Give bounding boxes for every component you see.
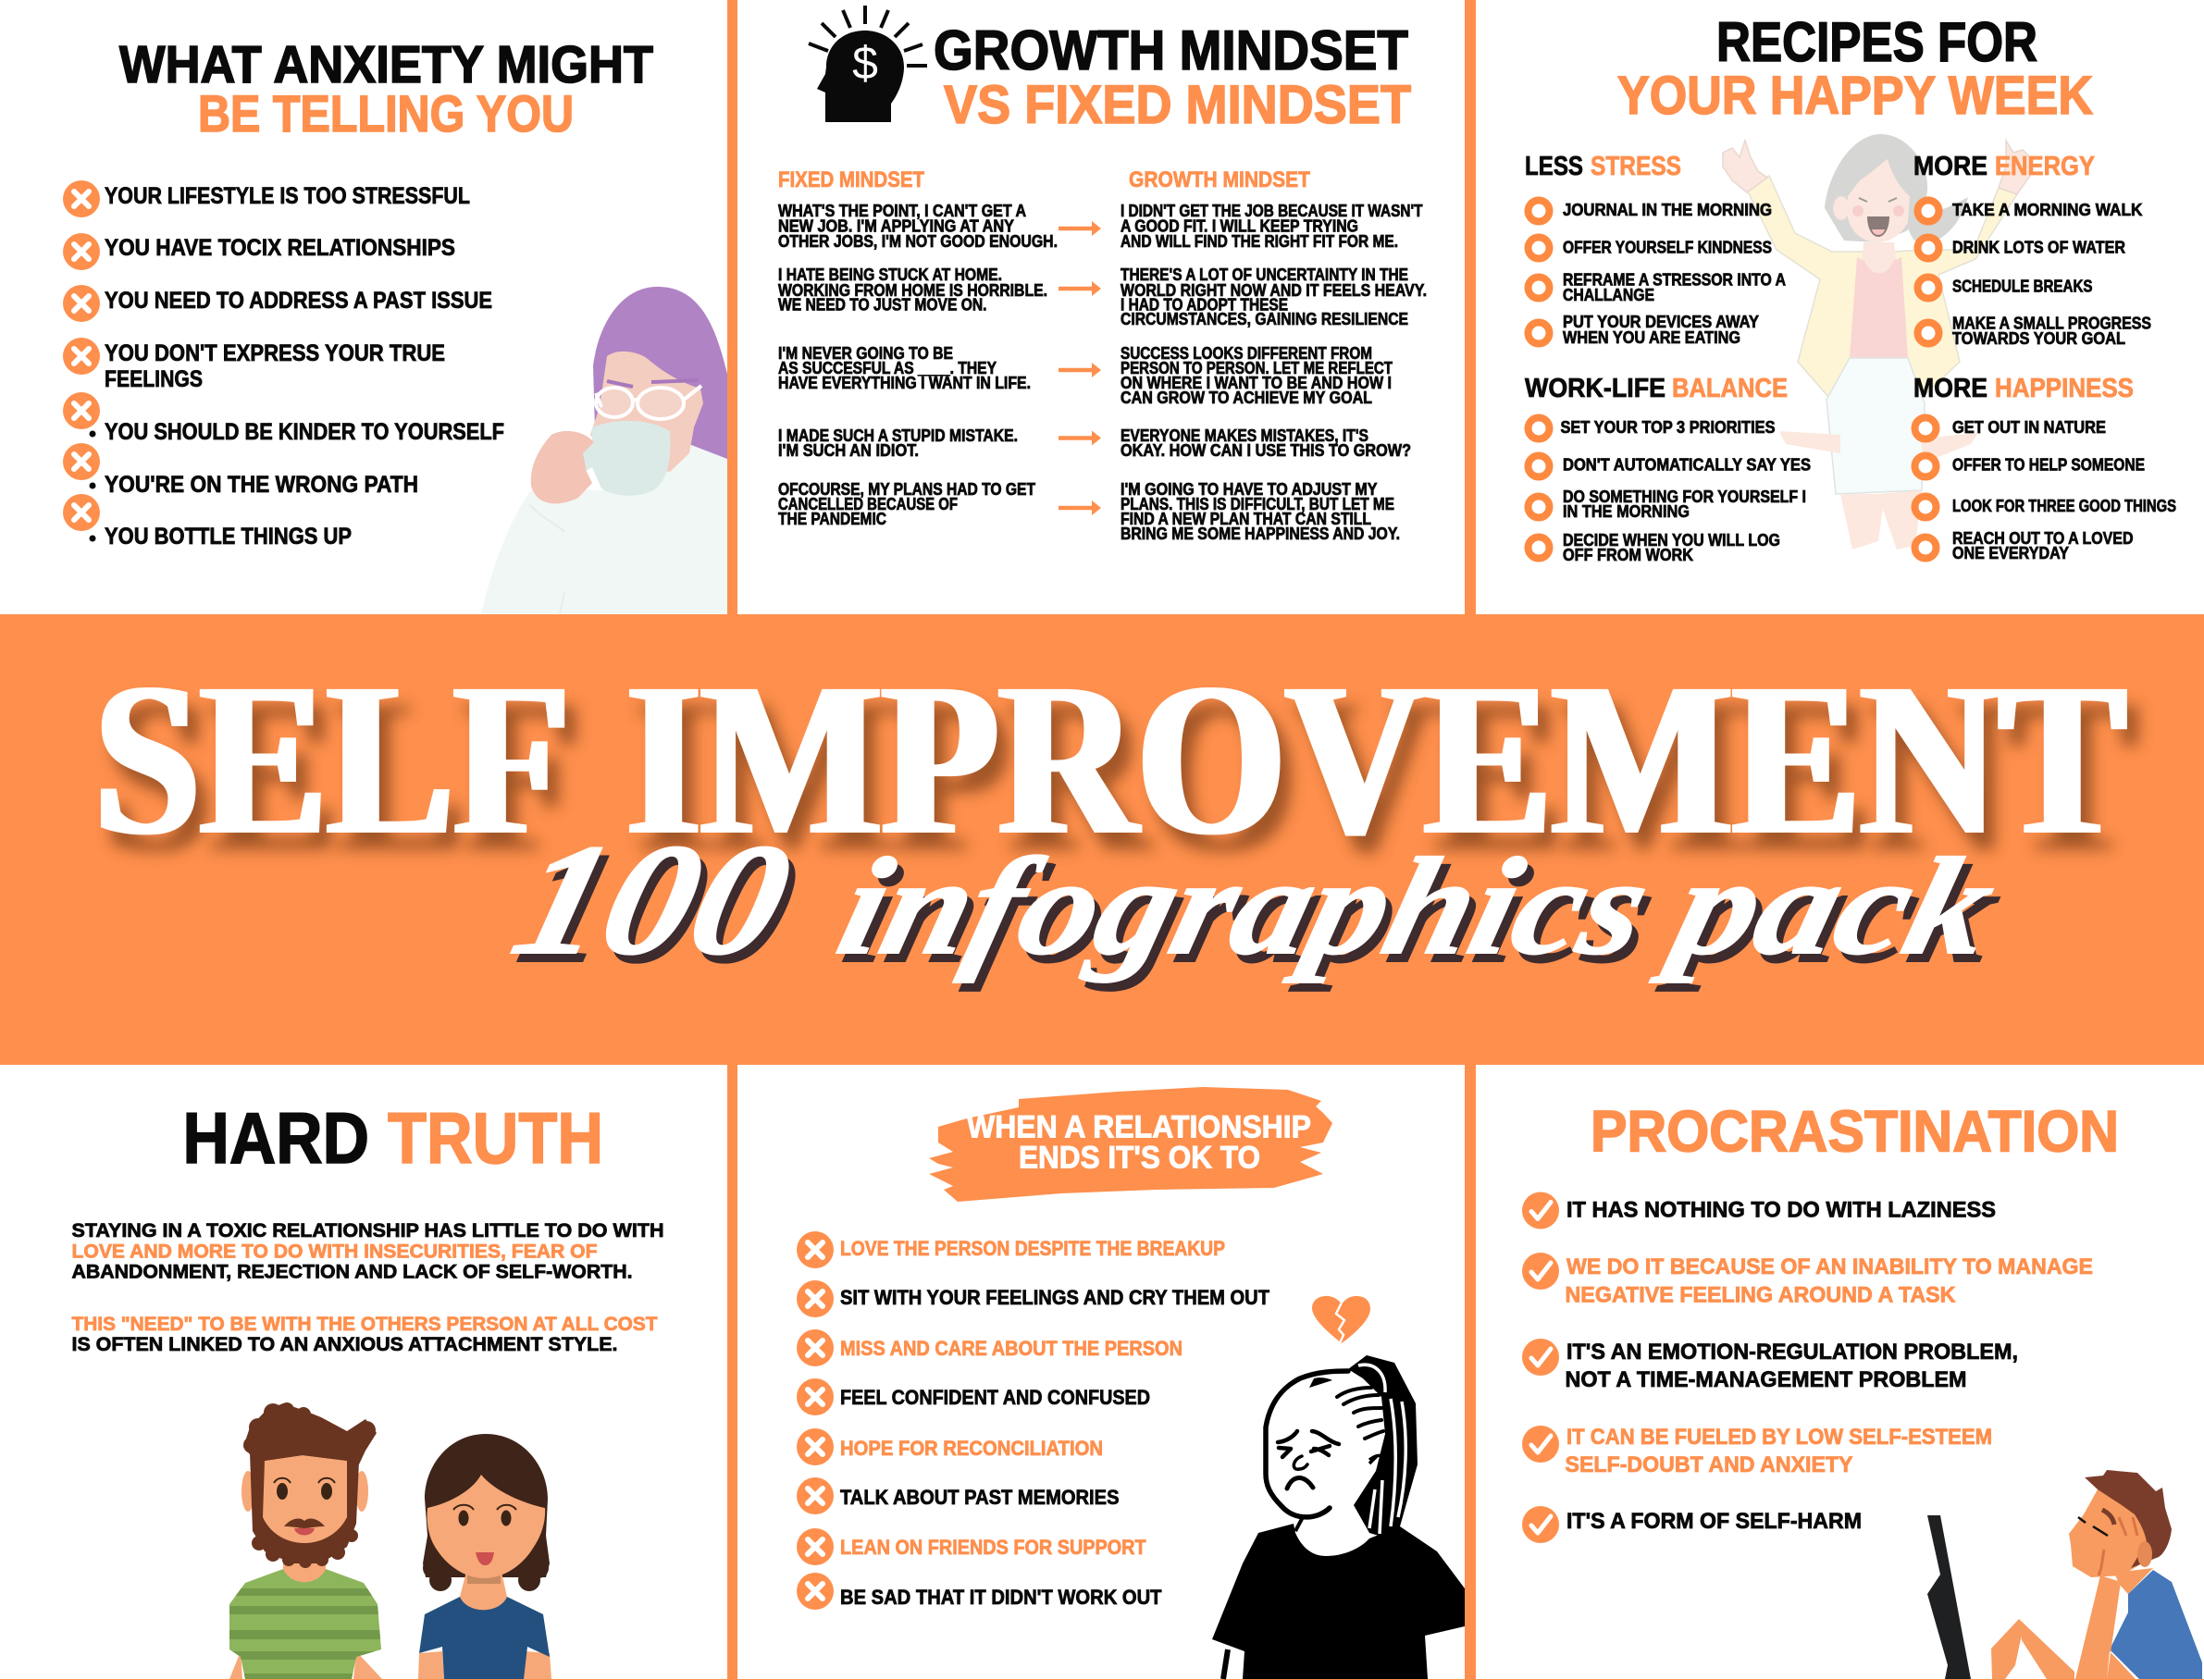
row 3: success: CAN GROW TO ACHIEVE MY GOAL bbox=[1121, 389, 1372, 407]
list item: laziness bbox=[1522, 1192, 1996, 1229]
text block: toxic relationship: STAYING IN A TOXIC RELATIONSHIP HAS LITTLE TO DO WITH bbox=[72, 1219, 664, 1241]
row 2: home: CIRCUMSTANCES, GAINING RESILIENCE bbox=[1121, 310, 1408, 328]
list: more happiness: OFFER TO HELP SOMEONE bbox=[1952, 455, 2145, 474]
heading: recipes for your happy week: YOUR HAPPY WEEK bbox=[1617, 66, 2093, 126]
row 1: job: AND WILL FIND THE RIGHT FIT FOR ME. bbox=[1121, 232, 1398, 251]
heading: recipes for your happy week: RECIPES FOR bbox=[1716, 11, 2037, 73]
list item: be sad: BE SAD THAT IT DIDN'T WORK OUT bbox=[840, 1586, 1162, 1609]
text block: anxious attachment bbox=[72, 1313, 657, 1355]
row 5: plans: FIND A NEW PLAN THAT CAN STILL bbox=[1121, 510, 1371, 528]
panel: when a relationship ends bbox=[797, 1087, 1465, 1679]
panel: hard truth bbox=[72, 1097, 664, 1680]
subtitle: 100 infographics pack bbox=[499, 810, 2015, 995]
heading: hard truth: HARD bbox=[183, 1097, 369, 1179]
list: work-life balance: DECIDE WHEN YOU WILL LOG bbox=[1563, 530, 1780, 550]
list item: sit with feelings: SIT WITH YOUR FEELINGS AND CRY THEM OUT bbox=[840, 1286, 1269, 1309]
list: more energy: DRINK LOTS OF WATER bbox=[1952, 237, 2125, 257]
list: more energy: TOWARDS YOUR GOAL bbox=[1952, 328, 2125, 348]
column heading: growth mindset: GROWTH MINDSET bbox=[1129, 167, 1310, 192]
subheading: less stress: LESS bbox=[1525, 152, 1583, 181]
list item: low self-esteem bbox=[1522, 1425, 1992, 1477]
heading: what anxiety might be telling you bbox=[119, 35, 653, 142]
list item: true feelings: YOU DON'T EXPRESS YOUR TRUE bbox=[105, 340, 445, 366]
list: more happiness bbox=[1915, 417, 2176, 562]
list: more happiness: GET OUT IN NATURE bbox=[1952, 417, 2106, 437]
subtitle: 100 infographics pack: infographics bbox=[825, 829, 1664, 982]
banner: self improvement title bbox=[0, 614, 2204, 1065]
subtitle: 100 infographics pack: pack bbox=[1655, 837, 2015, 991]
row 1: job: WHAT'S THE POINT, I CAN'T GET A bbox=[778, 202, 1026, 220]
heading: what anxiety might be telling you: WHAT ANXIETY MIGHT bbox=[119, 35, 653, 94]
text block: anxious attachment: IS OFTEN LINKED TO AN ANXIOUS ATTACHMENT STYLE. bbox=[72, 1333, 618, 1355]
row 1: job: NEW JOB. I'M APPLYING AT ANY bbox=[778, 216, 1014, 235]
row 5: plans: THE PANDEMIC bbox=[778, 510, 886, 528]
text block: toxic relationship: LOVE AND MORE TO DO WITH INSECURITIES, FEAR OF bbox=[72, 1240, 598, 1262]
title: self improvement: SELF bbox=[94, 638, 570, 881]
heading: brush stroke banner bbox=[929, 1087, 1332, 1202]
list: work-life balance: OFF FROM WORK bbox=[1563, 545, 1694, 564]
text block: anxious attachment: THIS "NEED" TO BE WITH THE OTHERS PERSON AT ALL COST bbox=[72, 1313, 657, 1335]
row 1: job: I DIDN'T GET THE JOB BECAUSE IT WASN'T bbox=[1121, 202, 1423, 220]
row 1: job: OTHER JOBS, I'M NOT GOOD ENOUGH. bbox=[778, 232, 1058, 251]
row 2: home: I HATE BEING STUCK AT HOME. bbox=[778, 266, 1002, 284]
row 3: success: HAVE EVERYTHING I WANT IN LIFE. bbox=[778, 374, 1031, 392]
text block: toxic relationship bbox=[72, 1219, 664, 1282]
subheading: work-life balance bbox=[1525, 374, 1788, 403]
subheading: more happiness: MORE bbox=[1913, 374, 1987, 403]
row 3: success bbox=[778, 344, 1393, 407]
illustration: computer monitor bbox=[1927, 1515, 1971, 1679]
list item: lean on friends bbox=[797, 1528, 1146, 1565]
list item: sit with feelings bbox=[797, 1280, 1269, 1317]
list: less stress bbox=[1529, 200, 1786, 347]
list: less stress: OFFER YOURSELF KINDNESS bbox=[1563, 237, 1772, 257]
row 5: plans bbox=[778, 480, 1400, 543]
heading: what anxiety might be telling you: BE TELLING YOU bbox=[198, 84, 574, 142]
illustration: woman drinking from a mug bbox=[481, 287, 727, 614]
list item: kinder bbox=[63, 392, 504, 445]
row 2: home: I HAD TO ADOPT THESE bbox=[1121, 296, 1288, 315]
row 3: success: I'M NEVER GOING TO BE bbox=[778, 344, 953, 363]
list item: lean on friends: LEAN ON FRIENDS FOR SUPPORT bbox=[840, 1536, 1146, 1559]
list item: true feelings: FEELINGS bbox=[105, 366, 203, 392]
subheading: less stress bbox=[1525, 152, 1681, 181]
subtitle: 100 infographics pack: infographics bbox=[832, 837, 1670, 991]
icon: head with dollar sign and rays: $ bbox=[852, 37, 878, 89]
list item: bottle things up bbox=[63, 494, 352, 550]
list: more happiness: ONE EVERYDAY bbox=[1952, 543, 2070, 562]
list item: past memories: TALK ABOUT PAST MEMORIES bbox=[840, 1486, 1120, 1509]
row 4: mistakes: I MADE SUCH A STUPID MISTAKE. bbox=[778, 426, 1018, 445]
row 4: mistakes: EVERYONE MAKES MISTAKES, IT'S bbox=[1121, 426, 1368, 445]
row 5: plans: OFCOURSE, MY PLANS HAD TO GET bbox=[778, 480, 1035, 499]
list: less stress: REFRAME A STRESSOR INTO A bbox=[1563, 270, 1786, 289]
subheading: more energy: ENERGY bbox=[1995, 152, 2095, 181]
heading: growth mindset vs fixed mindset: GROWTH MINDSET bbox=[934, 19, 1408, 81]
list item: confident and confused: FEEL CONFIDENT AND CONFUSED bbox=[840, 1386, 1150, 1409]
subheading: work-life balance: BALANCE bbox=[1672, 374, 1788, 403]
list item: past issue bbox=[63, 285, 492, 322]
heading: hard truth bbox=[183, 1097, 603, 1179]
list item: confident and confused bbox=[797, 1378, 1150, 1415]
subtitle: 100 infographics pack: 100 bbox=[499, 810, 806, 987]
panel: recipes for your happy week bbox=[1525, 11, 2176, 564]
list: more energy: MAKE A SMALL PROGRESS bbox=[1952, 313, 2151, 333]
icon: broken heart bbox=[1312, 1296, 1370, 1343]
list item: inability to manage bbox=[1522, 1253, 2093, 1307]
panel: what anxiety might be telling you bbox=[63, 35, 727, 614]
list: work-life balance: DON'T AUTOMATICALLY SAY YES bbox=[1563, 455, 1811, 474]
illustration: woman with brown hair bbox=[418, 1434, 551, 1679]
list item: laziness: IT HAS NOTHING TO DO WITH LAZINESS bbox=[1566, 1198, 1996, 1223]
list: more energy bbox=[1917, 200, 2151, 348]
subheading: less stress: STRESS bbox=[1591, 152, 1681, 181]
list item: reconciliation bbox=[797, 1428, 1103, 1465]
list item: wrong path bbox=[63, 443, 418, 498]
list item: miss and care: MISS AND CARE ABOUT THE PERSON bbox=[840, 1337, 1182, 1360]
list: more energy: SCHEDULE BREAKS bbox=[1952, 276, 2093, 295]
row 2: home: WORKING FROM HOME IS HORRIBLE. bbox=[778, 281, 1047, 300]
list: less stress: JOURNAL IN THE MORNING bbox=[1563, 200, 1772, 219]
illustration: tired man at the computer bbox=[1991, 1470, 2202, 1679]
heading: brush stroke banner: WHEN A RELATIONSHIP bbox=[967, 1109, 1311, 1144]
list item: self-harm: IT'S A FORM OF SELF-HARM bbox=[1566, 1509, 1862, 1534]
subheading: more happiness: HAPPINESS bbox=[1995, 374, 2134, 403]
title: self improvement: SELF bbox=[105, 655, 581, 897]
list: less stress: WHEN YOU ARE EATING bbox=[1563, 327, 1740, 347]
heading: growth mindset vs fixed mindset bbox=[934, 19, 1411, 135]
row 3: success: PERSON TO PERSON. LET ME REFLECT bbox=[1121, 359, 1393, 377]
subheading: work-life balance: WORK-LIFE bbox=[1525, 374, 1665, 403]
heading: growth mindset vs fixed mindset: VS FIXED MINDSET bbox=[944, 75, 1411, 135]
row 2: home: WORLD RIGHT NOW AND IT FEELS HEAVY. bbox=[1121, 281, 1427, 300]
list: work-life balance bbox=[1529, 417, 1811, 564]
subtitle: 100 infographics pack: 100 bbox=[505, 819, 812, 995]
list item: emotion regulation: IT'S AN EMOTION-REGULATION PROBLEM, bbox=[1566, 1340, 2018, 1365]
list: more happiness: REACH OUT TO A LOVED bbox=[1952, 528, 2134, 548]
list item: love the person bbox=[797, 1231, 1225, 1268]
row 1: job bbox=[778, 202, 1423, 251]
text block: toxic relationship: ABANDONMENT, REJECTION AND LACK OF SELF-WORTH. bbox=[72, 1260, 633, 1282]
list item: low self-esteem: IT CAN BE FUELED BY LOW SELF-ESTEEM bbox=[1566, 1425, 1992, 1450]
heading: recipes for your happy week bbox=[1617, 11, 2093, 126]
subheading: more happiness bbox=[1913, 374, 2134, 403]
panel: procrastination bbox=[1522, 1099, 2202, 1679]
title: self improvement bbox=[94, 638, 2137, 897]
list item: low self-esteem: SELF-DOUBT AND ANXIETY bbox=[1566, 1452, 1852, 1477]
row 2: home bbox=[778, 266, 1427, 328]
list: work-life balance: DO SOMETHING FOR YOURSELF I bbox=[1563, 487, 1806, 506]
row 2: home: WE NEED TO JUST MOVE ON. bbox=[778, 296, 986, 315]
row 4: mistakes: OKAY. HOW CAN I USE THIS TO GROW? bbox=[1121, 441, 1411, 460]
row 5: plans: PLANS. THIS IS DIFFICULT, BUT LET ME bbox=[1121, 495, 1394, 513]
list item: emotion regulation bbox=[1522, 1339, 2018, 1392]
list item: true feelings bbox=[63, 338, 445, 392]
list item: emotion regulation: NOT A TIME-MANAGEMENT PROBLEM bbox=[1566, 1367, 1967, 1392]
list item: lifestyle: YOUR LIFESTYLE IS TOO STRESSFUL bbox=[105, 183, 470, 209]
list item: wrong path: YOU'RE ON THE WRONG PATH bbox=[105, 472, 418, 498]
list: work-life balance: SET YOUR TOP 3 PRIORITIES bbox=[1560, 417, 1775, 437]
row 1: job: A GOOD FIT. I WILL KEEP TRYING bbox=[1121, 216, 1358, 235]
row 4: mistakes: I'M SUCH AN IDIOT. bbox=[778, 441, 919, 460]
list item: love the person: LOVE THE PERSON DESPITE THE BREAKUP bbox=[840, 1237, 1225, 1260]
row 5: plans: BRING ME SOME HAPPINESS AND JOY. bbox=[1121, 525, 1400, 543]
list: less stress: PUT YOUR DEVICES AWAY bbox=[1563, 312, 1760, 331]
list: less stress: CHALLANGE bbox=[1563, 285, 1654, 304]
row 4: mistakes bbox=[778, 426, 1411, 460]
list: work-life balance: IN THE MORNING bbox=[1563, 501, 1690, 521]
icon: head with dollar sign and rays bbox=[809, 6, 927, 122]
row 2: home: THERE'S A LOT OF UNCERTAINTY IN THE bbox=[1121, 266, 1408, 284]
row 3: success: AS SUCCESFUL AS ____. THEY bbox=[778, 359, 997, 377]
list item: be sad bbox=[797, 1573, 1162, 1610]
illustration: faded jumping woman bbox=[1723, 134, 2032, 550]
list item: inability to manage: NEGATIVE FEELING AROUND A TASK bbox=[1566, 1282, 1956, 1307]
list item: kinder: YOU SHOULD BE KINDER TO YOURSELF bbox=[105, 419, 504, 445]
list item: inability to manage: WE DO IT BECAUSE OF AN INABILITY TO MANAGE bbox=[1566, 1254, 2093, 1279]
subtitle: 100 infographics pack: pack bbox=[1649, 829, 2009, 982]
row 3: success: ON WHERE I WANT TO BE AND HOW I bbox=[1121, 374, 1392, 392]
list item: past memories bbox=[797, 1477, 1120, 1514]
heading: procrastination: PROCRASTINATION bbox=[1591, 1099, 2119, 1164]
row 3: success: SUCCESS LOOKS DIFFERENT FROM bbox=[1121, 344, 1372, 363]
panel: growth mindset vs fixed mindset bbox=[778, 6, 1427, 543]
list item: self-harm bbox=[1522, 1506, 1862, 1543]
illustration: sad girl with ponytail bbox=[1212, 1355, 1465, 1679]
list item: relationships bbox=[63, 233, 455, 270]
heading: brush stroke banner: ENDS IT'S OK TO bbox=[1019, 1141, 1260, 1176]
subheading: more energy bbox=[1913, 152, 2095, 181]
column heading: fixed mindset: FIXED MINDSET bbox=[778, 167, 924, 192]
list item: bottle things up: YOU BOTTLE THINGS UP bbox=[105, 524, 352, 550]
list item: relationships: YOU HAVE TOCIX RELATIONSHIPS bbox=[105, 235, 455, 261]
list item: reconciliation: HOPE FOR RECONCILIATION bbox=[840, 1437, 1103, 1460]
row 5: plans: I'M GOING TO HAVE TO ADJUST MY bbox=[1121, 480, 1377, 499]
heading: hard truth: TRUTH bbox=[388, 1097, 603, 1179]
illustration: bearded man bbox=[222, 1402, 389, 1680]
subheading: more energy: MORE bbox=[1913, 152, 1987, 181]
list item: miss and care bbox=[797, 1329, 1182, 1366]
row 5: plans: CANCELLED BECAUSE OF bbox=[778, 495, 958, 513]
list item: lifestyle bbox=[63, 180, 470, 217]
list item: past issue: YOU NEED TO ADDRESS A PAST ISSUE bbox=[105, 288, 492, 314]
list: more energy: TAKE A MORNING WALK bbox=[1952, 200, 2143, 219]
